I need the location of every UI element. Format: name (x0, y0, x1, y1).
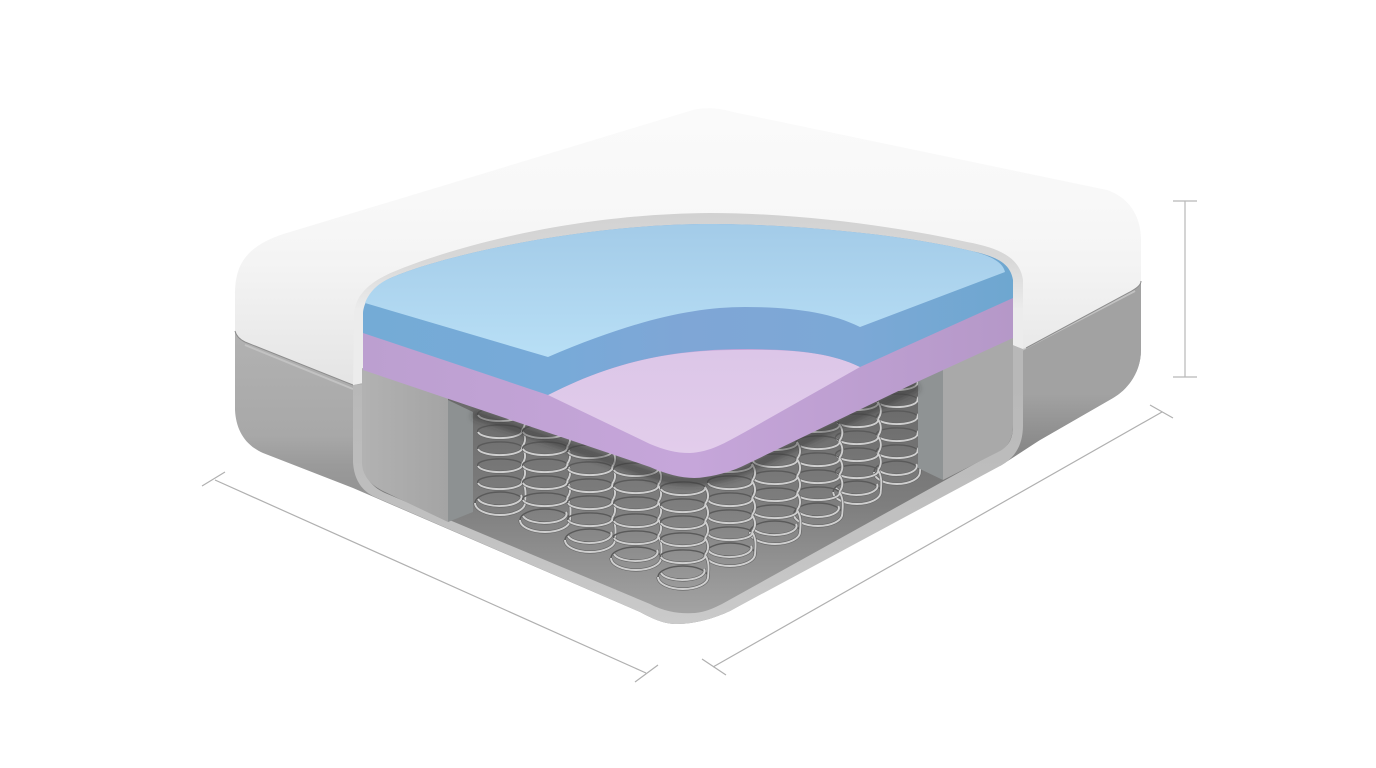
blue top surface (365, 224, 1005, 357)
purple top surface (548, 350, 860, 453)
spring F (705, 459, 756, 566)
tray rim (353, 345, 1023, 624)
spring I (833, 397, 881, 504)
dimension line: left width (202, 472, 658, 682)
blue foam layer (363, 224, 1013, 395)
dimension line: right length (702, 405, 1173, 675)
spring D (611, 463, 662, 570)
right foam block (918, 334, 1013, 480)
spring A (475, 408, 526, 515)
white top cover (235, 108, 1141, 385)
grey base outer shell (235, 282, 1141, 624)
dimension line: height (1173, 201, 1197, 377)
left foam block (362, 368, 473, 522)
shadow under purple layer (473, 386, 918, 481)
coil springs (475, 377, 921, 589)
spring G (750, 437, 801, 544)
spring E (658, 482, 709, 589)
purple foam layer (363, 298, 1013, 478)
spring J (874, 377, 921, 484)
tray floor (363, 300, 1013, 613)
spring C (565, 445, 616, 552)
spring B (520, 425, 571, 532)
spring H (794, 419, 843, 526)
cutout opening edge (353, 213, 1023, 385)
mattress cutaway illustration (235, 108, 1141, 624)
